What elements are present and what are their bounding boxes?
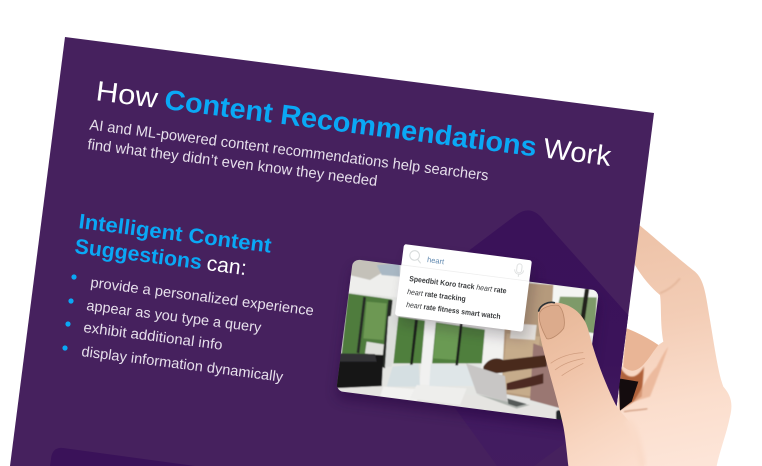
- section heading: [73, 210, 273, 280]
- nail: [539, 305, 564, 339]
- title: Content Recommendations: [163, 84, 539, 162]
- bullet text: provide a personalized experience: [89, 275, 315, 320]
- section heading: Suggestions: [73, 235, 203, 274]
- bullet dots: [62, 274, 77, 351]
- search suggestions box: [395, 244, 532, 332]
- icon: magnifier: [409, 250, 422, 263]
- search box shadow: [399, 252, 536, 340]
- icon: microphone: [514, 263, 524, 277]
- bullet text: [80, 275, 315, 386]
- suggestion list: [405, 274, 507, 321]
- photo card: living room with laptop: [337, 260, 598, 420]
- subtitle: find what they didn’t even know they needed: [86, 136, 378, 190]
- suggestion list: Speedbit Koro track heart rate: [409, 274, 507, 295]
- knuckle creases: [551, 353, 585, 376]
- hand behind the page: [568, 225, 731, 466]
- title: [94, 75, 614, 172]
- title: How: [94, 75, 161, 114]
- bottom dark panel: [50, 448, 195, 466]
- bullet text: exhibit additional info: [82, 320, 223, 354]
- search query: heart: [427, 255, 446, 266]
- hand: thumb over the page: [538, 302, 644, 466]
- nail polish edge: [539, 302, 554, 311]
- background diamond shape: [468, 210, 628, 405]
- section heading: Intelligent Content: [77, 210, 273, 258]
- suggestion list: heart rate fitness smart watch: [406, 300, 502, 321]
- title: Work: [542, 133, 614, 172]
- section heading: can:: [205, 252, 248, 280]
- card shadow: [336, 267, 599, 430]
- bullet text: display information dynamically: [80, 344, 285, 386]
- bullet text: appear as you type a query: [85, 298, 263, 336]
- bullet list: [62, 274, 315, 386]
- subtitle: AI and ML-powered content recommendations help searchers: [88, 117, 489, 185]
- panel: purple page: [10, 37, 672, 466]
- suggestion list: heart rate tracking: [407, 287, 467, 304]
